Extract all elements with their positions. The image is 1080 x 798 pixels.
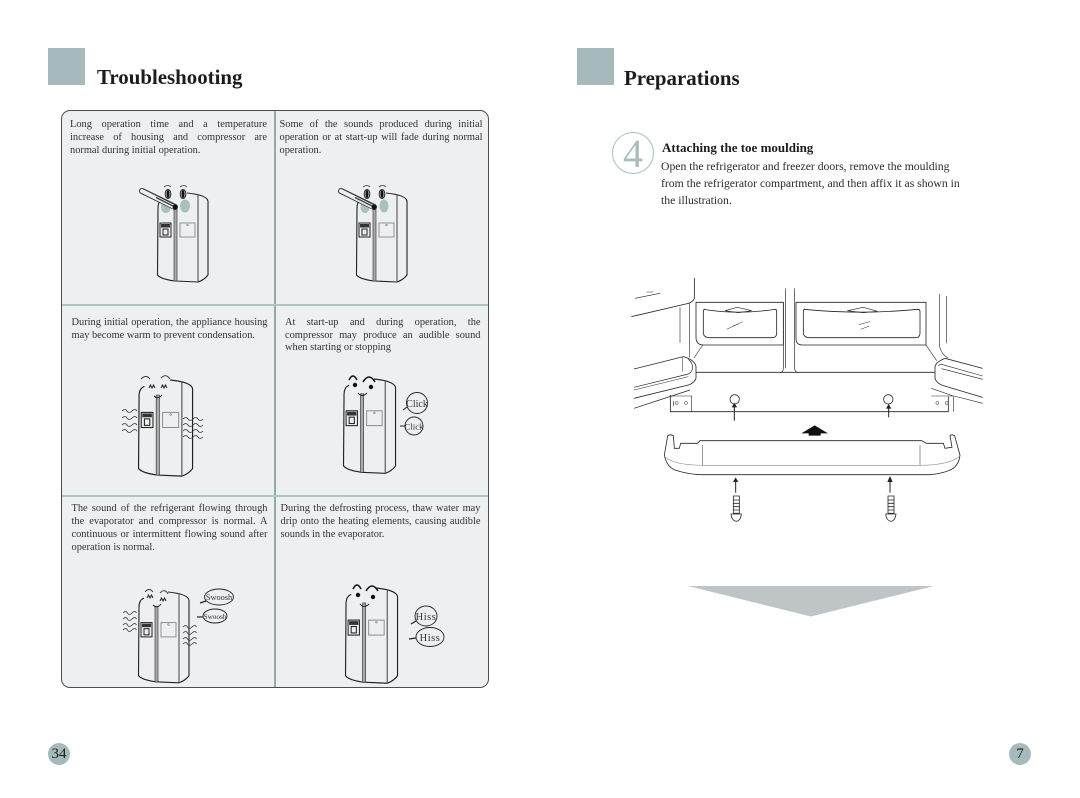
text: compressor click: when starting or stopping	[285, 342, 391, 352]
header icon: preparations square	[577, 48, 614, 85]
panel: troubleshooting grid	[61, 110, 489, 688]
door pockets and cabinet	[670, 288, 953, 412]
cell: compressor click	[285, 316, 480, 474]
text: sounds at start-up: operation.	[280, 144, 321, 156]
big arrow: down	[688, 586, 934, 616]
text: defrosting: During the defrosting process, thaw water may	[280, 502, 480, 514]
screws	[731, 496, 896, 521]
illustration: fridge with thermometer	[142, 186, 208, 282]
text: housing warm: may become warm to prevent condensation.	[72, 330, 255, 340]
label: swoosh: Swoosh	[204, 613, 227, 621]
illustration: fridge with thermometer	[341, 186, 407, 282]
page number 34	[48, 743, 70, 765]
text: sounds at start-up: operation or at start-up will fade during normal	[280, 132, 482, 142]
left door	[631, 278, 696, 408]
label: swoosh: Swoosh	[206, 593, 233, 602]
step description: the illustration.	[661, 194, 732, 207]
arrows	[732, 403, 893, 493]
text: refrigerant flow	[72, 502, 268, 552]
cell: refrigerant flow	[72, 502, 268, 684]
text: defrosting: drip onto the heating elements, causing audible	[280, 516, 480, 526]
illustration: smiling fridge with click bubbles	[344, 376, 428, 473]
text: sounds at start-up	[280, 118, 482, 156]
text: defrosting: sounds in the evaporator.	[280, 528, 384, 540]
text: long operation time	[70, 118, 267, 156]
cell: defrosting	[280, 502, 480, 684]
text: refrigerant flow: operation is normal.	[72, 542, 155, 552]
illustration: toe moulding installation	[631, 278, 983, 522]
step heading: Attaching the toe moulding	[662, 140, 813, 155]
title: Preparations: Preparations	[624, 66, 740, 90]
text: defrosting	[280, 502, 480, 540]
text: compressor click	[285, 316, 480, 352]
illustration: smiling fridge with hiss bubbles	[346, 585, 444, 683]
title: Troubleshooting: Troubleshooting	[97, 65, 242, 89]
text: housing warm	[72, 316, 268, 340]
illustration: warm fridge with heat waves	[122, 376, 203, 476]
cell: housing warm	[72, 316, 268, 477]
illustration: fridge with swoosh bubbles	[123, 589, 234, 683]
text: housing warm: During initial operation, the appliance housing	[72, 316, 268, 328]
cell: sounds at start-up	[280, 118, 482, 282]
label: hiss: Hiss	[420, 633, 440, 644]
page number 7	[1009, 743, 1031, 765]
text: refrigerant flow: The sound of the refrigerant flowing through	[72, 502, 268, 514]
toe moulding	[664, 435, 960, 475]
step description: from the refrigerator compartment, and then affix it as shown in	[661, 177, 960, 190]
right door	[935, 294, 983, 403]
page number 34: 34	[52, 746, 66, 762]
text: compressor click: At start-up and during operation, the	[285, 316, 480, 328]
text: sounds at start-up: Some of the sounds produced during initial	[280, 118, 482, 130]
text: long operation time: increase of housing and compressor are	[70, 132, 267, 142]
text: long operation time: Long operation time and a temperature	[70, 118, 267, 130]
step number 4	[612, 131, 654, 176]
step description	[661, 160, 960, 207]
step description: Open the refrigerator and freezer doors, remove the moulding	[661, 160, 950, 173]
header icon: troubleshooting square	[48, 48, 85, 85]
step number 4: 4	[623, 131, 643, 176]
text: refrigerant flow: the evaporator and compressor is normal. A	[72, 516, 268, 526]
text: long operation time: normal during initial operation.	[70, 144, 200, 156]
label: click: Click	[404, 422, 424, 432]
label: click: Click	[406, 399, 428, 410]
text: refrigerant flow: continuous or intermittent flowing sound after	[72, 528, 268, 540]
page number 7: 7	[1016, 746, 1024, 762]
label: hiss: Hiss	[416, 612, 436, 623]
text: compressor click: compressor may produce an audible sound	[285, 330, 480, 340]
cell: long operation time	[70, 118, 267, 282]
